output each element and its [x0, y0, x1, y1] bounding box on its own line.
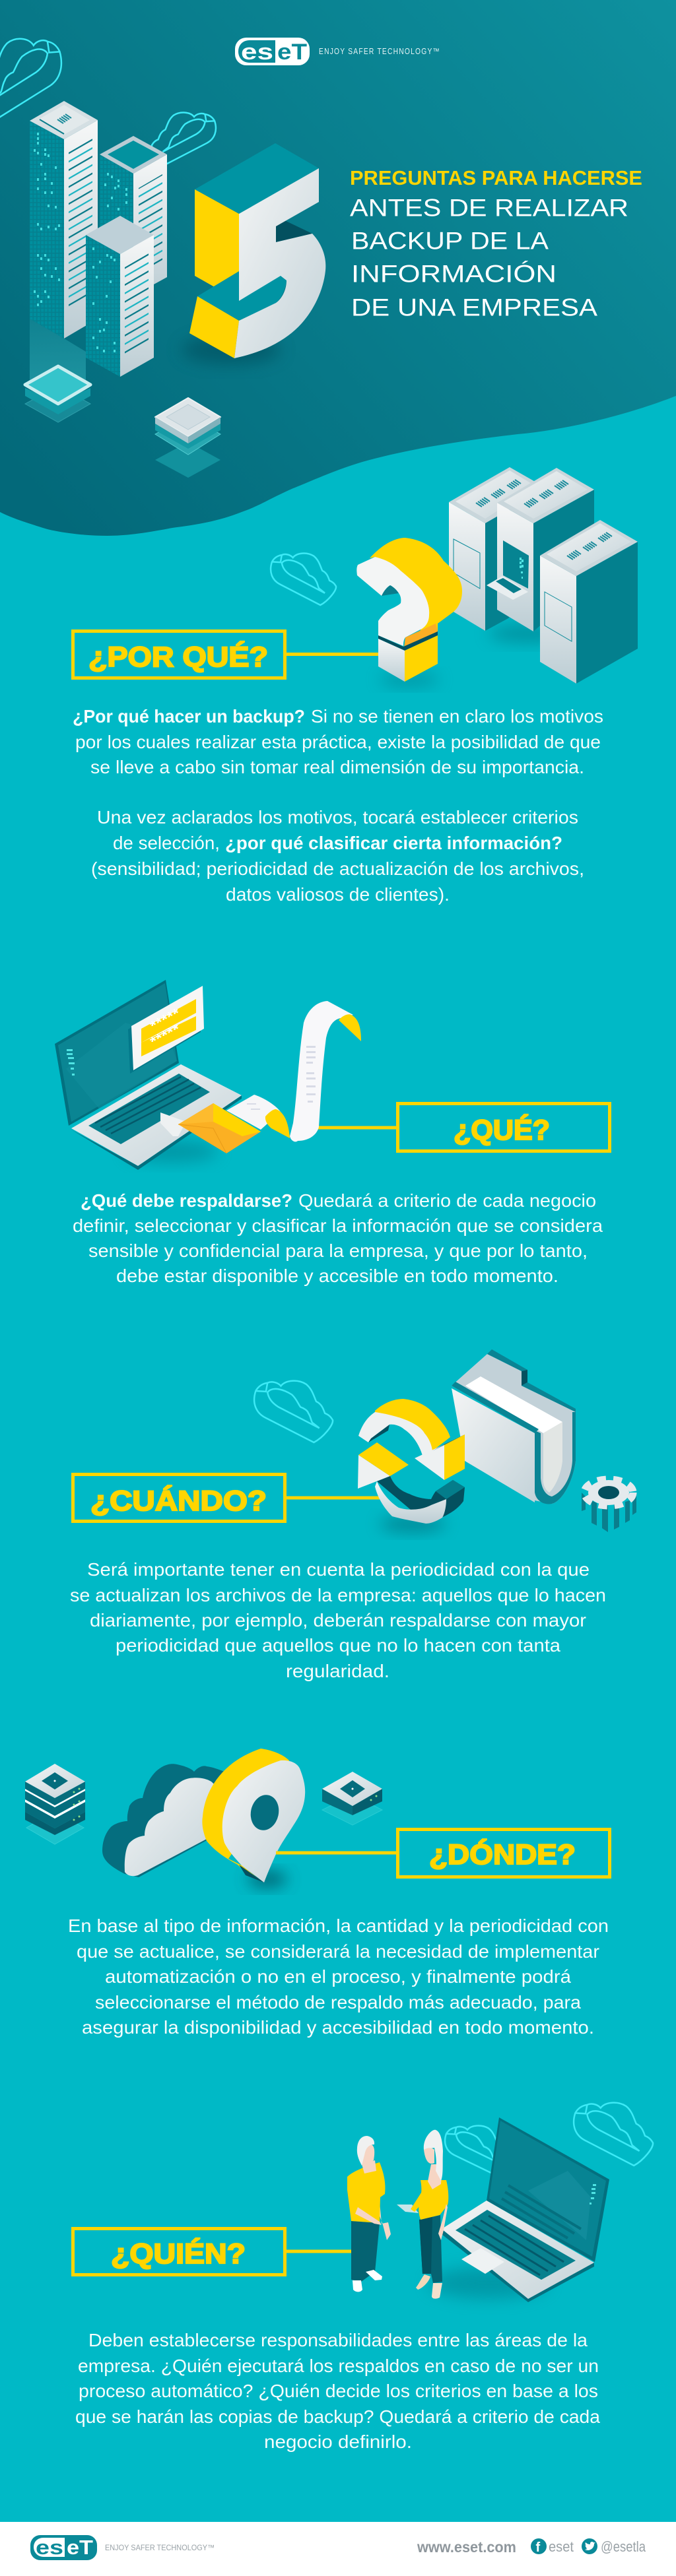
illustration: sync arrows [358, 1399, 465, 1532]
headline [350, 167, 642, 321]
connector: qué [317, 1126, 396, 1130]
text: cuándo [70, 1559, 606, 1681]
connector: cuándo [287, 1497, 382, 1499]
illustration: location pin [202, 1749, 305, 1883]
text: quién [75, 2330, 600, 2452]
text: por qué: de selección, [113, 833, 220, 853]
illustration: cloud [102, 1764, 224, 1877]
text: por qué: se lleve a cabo sin tomar real dimensión de su importancia. [90, 757, 584, 777]
cloud outline: cuándo [254, 1381, 333, 1442]
header logo: ESET: es [241, 40, 273, 65]
illustration: woman [397, 2130, 448, 2299]
headline: DE UNA EMPRESA [351, 294, 597, 321]
illustration: envelope [178, 1103, 261, 1153]
illustration: folder [452, 1349, 576, 1504]
text: qué: sensible y confidencial para la empresa, y que por lo tanto, [88, 1240, 588, 1261]
illustration: scrolling paper [226, 1001, 361, 1142]
footer tagline: ENJOY SAFER TECHNOLOGY™ [105, 2543, 215, 2552]
label: quién: ¿QUIÉN? [111, 2238, 246, 2270]
illustration: tower 1 [30, 101, 98, 338]
label: dónde [397, 1829, 610, 1877]
text: por qué: ¿por qué clasificar cierta información? [225, 833, 562, 853]
illustration: tower 2 [100, 136, 167, 296]
illustration: metal pad [155, 398, 220, 478]
text: dónde: En base al tipo de información, la cantidad y la periodicidad con [68, 1916, 609, 1936]
illustration: man [347, 2136, 391, 2292]
text: dónde: asegurar la disponibilidad y accesibilidad en todo momento. [82, 2017, 594, 2038]
headline: PREGUNTAS PARA HACERSE [350, 167, 642, 189]
header tagline: ENJOY SAFER TECHNOLOGY™ [319, 47, 440, 56]
headline: ANTES DE REALIZAR [350, 194, 628, 222]
footer facebook handle: eset [549, 2538, 574, 2555]
illustration: server stack [25, 1764, 85, 1844]
text: dónde: automatización o no en el proceso, y finalmente podrá [105, 1966, 571, 1987]
connector: dónde [276, 1852, 396, 1854]
text: por qué: por los cuales realizar esta práctica, existe la posibilidad de que [75, 732, 601, 752]
text: qué: debe estar disponible y accesible en todo momento. [116, 1266, 558, 1286]
illustration: teal pad [25, 366, 90, 422]
footer logo: es [36, 2536, 63, 2559]
text: por qué: ¿Por qué hacer un backup? [73, 706, 305, 726]
label: qué: ¿QUÉ? [454, 1114, 550, 1146]
label: cuándo: ¿CUÁNDO? [90, 1485, 267, 1517]
text: por qué [73, 706, 603, 905]
headline: BACKUP DE LA [351, 227, 549, 255]
footer twitter handle: @esetla [601, 2538, 646, 2555]
text: quién: negocio definirlo. [264, 2431, 412, 2452]
cloud outline: por qué [271, 554, 336, 605]
text: por qué: datos valiosos de clientes). [226, 884, 450, 905]
illustration: open laptop [429, 2117, 609, 2302]
illustration: question mark [356, 538, 462, 686]
text: qué: ¿Qué debe respaldarse? [81, 1190, 292, 1211]
illustration: tower 3 [86, 216, 154, 377]
icon: twitter [582, 2538, 597, 2554]
headline: INFORMACIÓN [351, 260, 557, 288]
text: dónde: seleccionarse el método de respaldo más adecuado, para [95, 1992, 581, 2012]
illustration: laptop with password: ***** [148, 1021, 183, 1049]
shadow of number 5 [182, 335, 281, 364]
icon: facebook [531, 2538, 547, 2555]
label: qué [397, 1103, 610, 1151]
label: quién [73, 2229, 285, 2275]
label: dónde: ¿DÓNDE? [429, 1838, 576, 1871]
text: quién: que se harán las copias de backup? Quedará a criterio de cada [75, 2406, 600, 2427]
footer url: www.eset.com [417, 2538, 516, 2556]
text: qué: definir, seleccionar y clasificar la información que se considera [73, 1215, 603, 1236]
illustration: server racks [449, 467, 638, 684]
text: dónde [68, 1916, 609, 2038]
icon: facebook: f [536, 2540, 540, 2555]
header logo: ESET [235, 38, 310, 65]
cloud outline: quién right [574, 2103, 653, 2166]
header wave background [0, 0, 676, 536]
illustration: gear [582, 1479, 636, 1532]
illustration: laptop with password: ***** [148, 1006, 183, 1033]
footer bar [0, 2522, 676, 2576]
cloud outline top left [0, 39, 61, 117]
connector: por qué [287, 653, 382, 656]
shadow: pin [248, 1871, 287, 1887]
text: quién: empresa. ¿Quién ejecutará los respaldos en caso de no ser un [78, 2356, 599, 2376]
text: qué [73, 1190, 603, 1286]
label: por qué: ¿POR QUÉ? [88, 641, 268, 673]
text: qué: Quedará a criterio de cada negocio [298, 1190, 596, 1211]
header logo: ESET: eT [277, 40, 307, 65]
text: cuándo: periodicidad que aquellos que no lo hacen con tanta [116, 1635, 560, 1656]
footer logo [30, 2535, 97, 2560]
text: cuándo: Será importante tener en cuenta la periodicidad con la que [87, 1559, 590, 1580]
text: cuándo: diariamente, por ejemplo, deberán respaldarse con mayor [90, 1610, 586, 1630]
text: por qué: Si no se tienen en claro los motivos [311, 706, 603, 726]
illustration: light shaft under tower [30, 319, 86, 389]
text: quién: proceso automático? ¿Quién decide los criterios en base a los [79, 2381, 598, 2401]
text: dónde: que se actualice, se considerará la necesidad de implementar [77, 1941, 599, 1962]
footer logo: eT [67, 2536, 93, 2559]
text: quién: Deben establecerse responsabilidades entre las áreas de la [88, 2330, 588, 2350]
cloud outline behind building [152, 113, 216, 164]
text: cuándo: se actualizan los archivos de la empresa: aquellos que lo hacen [70, 1585, 606, 1605]
text: por qué: Una vez aclarados los motivos, tocará establecer criterios [97, 807, 578, 827]
label: cuándo [73, 1474, 285, 1522]
text: por qué: (sensibilidad; periodicidad de actualización de los archivos, [91, 858, 584, 879]
connector: quién [287, 2250, 353, 2253]
number 5 [189, 143, 325, 358]
illustration: laptop with password [55, 980, 242, 1170]
illustration: single server [322, 1772, 382, 1825]
label: por qué [73, 631, 285, 678]
text: cuándo: regularidad. [286, 1661, 389, 1681]
cloud outline: quién left [445, 2126, 511, 2175]
